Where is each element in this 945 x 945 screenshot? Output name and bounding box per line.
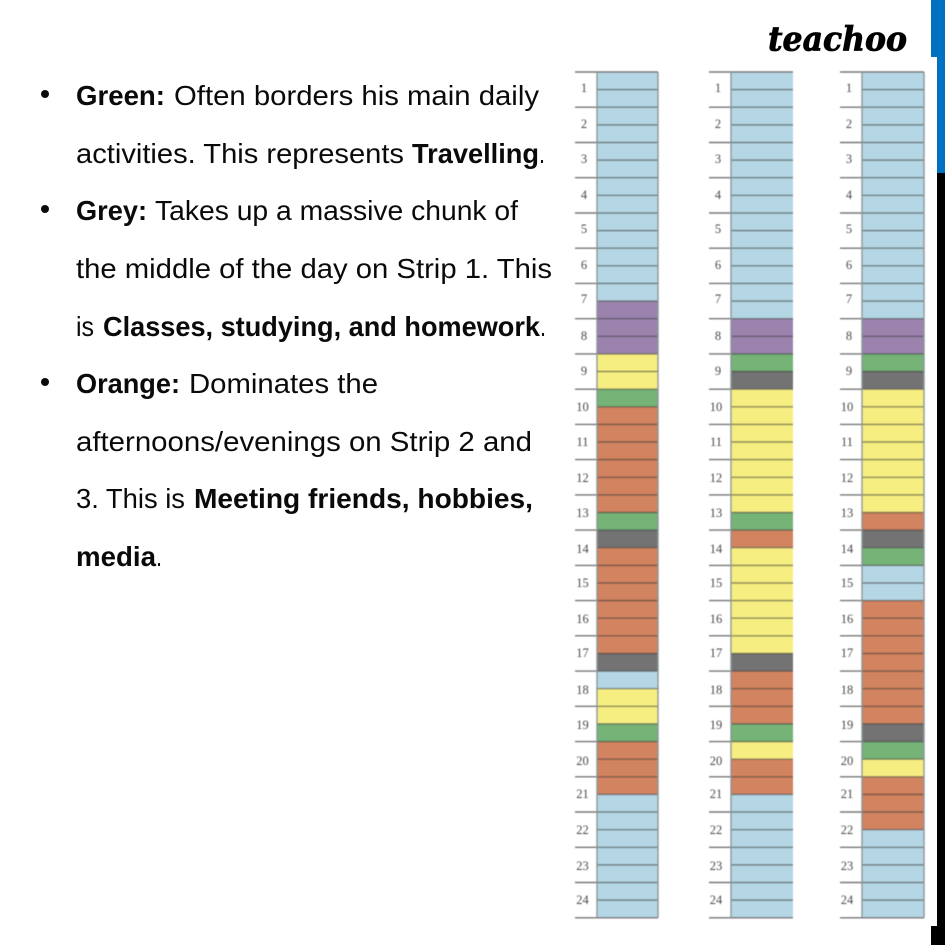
strip 1: 14 (576, 542, 590, 556)
bullet: orange: media (76, 541, 156, 572)
strip 2: 20 (710, 754, 722, 768)
strip 3: 2 (846, 117, 852, 131)
strip 3: 14 (841, 542, 854, 556)
strip 3: 18 (841, 683, 853, 697)
strip 2: 9 (715, 364, 721, 378)
strip 3: 20 (841, 754, 853, 768)
strip 1: 22 (576, 823, 589, 837)
bullet: green: Green: (76, 80, 165, 111)
bullet: green: Travelling (412, 138, 539, 169)
strip 2: 16 (710, 612, 722, 626)
strip 3: 10 (841, 400, 853, 414)
bullet: orange: Dominates the (189, 368, 378, 399)
strip 1: 6 (581, 258, 587, 272)
strip 2: 18 (710, 683, 722, 697)
bullet: orange: 3. This is (76, 483, 185, 514)
bullet: green (41, 80, 545, 169)
strip 1: 23 (576, 859, 589, 873)
strip 1: 11 (576, 435, 589, 449)
strip 2: 24 (710, 893, 723, 907)
strip 3: 6 (846, 258, 852, 272)
strip 3: 23 (841, 859, 853, 873)
strip 1: 15 (576, 576, 589, 590)
strip 1: 7 (581, 292, 587, 306)
strip 3: 15 (841, 576, 853, 590)
strip 1: 13 (576, 506, 589, 520)
strip 3: 22 (841, 823, 853, 837)
strip 2: 4 (715, 188, 722, 202)
bullet: grey: Classes, studying, and homework (103, 311, 540, 342)
bullet: grey: Takes up a massive chunk of (155, 195, 518, 226)
strip 2: 21 (710, 787, 722, 801)
strip 1: 5 (581, 222, 587, 236)
strip 2: 6 (715, 258, 721, 272)
strip 2: 12 (710, 471, 722, 485)
strip 2: 22 (710, 823, 722, 837)
strip 2: 11 (710, 435, 722, 449)
strip 1: 8 (581, 329, 587, 343)
strip 3: 8 (846, 329, 852, 343)
bullet: grey: is (76, 311, 94, 342)
strip 1: 12 (576, 471, 589, 485)
strip 3: 11 (841, 435, 853, 449)
strip 3: 21 (841, 787, 853, 801)
strip 2: 1 (715, 81, 721, 95)
strip 3: 3 (846, 152, 852, 166)
strip 2: 8 (715, 329, 721, 343)
strip 1: 21 (576, 787, 589, 801)
strip 1: 24 (576, 893, 590, 907)
strip 1: 1 (581, 81, 587, 95)
strip 2: 14 (710, 542, 723, 556)
strip 2: 3 (715, 152, 721, 166)
strip 1: 10 (576, 400, 589, 414)
strip 3: 19 (841, 718, 853, 732)
strip 3: 13 (841, 506, 853, 520)
strip 3: 7 (846, 292, 852, 306)
strip 3: 24 (841, 893, 854, 907)
strip 2: 17 (710, 646, 722, 660)
strip 3 (840, 72, 924, 918)
strip 2: 23 (710, 859, 722, 873)
bullet: grey: Grey: (76, 195, 147, 226)
bullet: grey: the middle of the day on Strip 1. This (76, 253, 552, 284)
strip 1: 4 (581, 188, 588, 202)
strip 3: 17 (841, 646, 853, 660)
strip 1: 19 (576, 718, 589, 732)
logo: teachoo: teachoo (768, 20, 907, 60)
strip 1: 16 (576, 612, 589, 626)
bullet: grey: . (540, 311, 546, 342)
bullet: orange: afternoons/evenings on Strip 2 and (76, 426, 532, 457)
strip 1 (575, 72, 658, 918)
strip 1: 9 (581, 364, 587, 378)
strip 2: 10 (710, 400, 722, 414)
bullet: green: activities. This represents (76, 138, 404, 169)
strip 2: 19 (710, 718, 722, 732)
strip 1: 18 (576, 683, 589, 697)
strip 2: 13 (710, 506, 722, 520)
bullet: orange: Orange: (76, 368, 180, 399)
bullet: green: Often borders his main daily (174, 80, 539, 111)
bullet: orange (41, 368, 533, 572)
strip 1: 20 (576, 754, 589, 768)
strip 3: 1 (846, 81, 852, 95)
bullet: grey (41, 195, 552, 342)
bullet: orange: . (156, 541, 162, 572)
strip 3: 4 (846, 188, 853, 202)
strip 1: 3 (581, 152, 587, 166)
strip 3: 9 (846, 364, 852, 378)
strip 1: 17 (576, 646, 589, 660)
strip 2 (709, 72, 793, 918)
strip 2: 5 (715, 222, 721, 236)
bullet: orange: Meeting friends, hobbies, (194, 483, 533, 514)
strip 3: 5 (846, 222, 852, 236)
text block: colour explanations (41, 80, 552, 572)
strip 2: 2 (715, 117, 721, 131)
strip 3: 16 (841, 612, 853, 626)
bullet: green: . (539, 138, 545, 169)
right edge bar (931, 0, 945, 945)
strip 2: 15 (710, 576, 722, 590)
strip 2: 7 (715, 292, 721, 306)
strip 3: 12 (841, 471, 853, 485)
strip 1: 2 (581, 117, 587, 131)
